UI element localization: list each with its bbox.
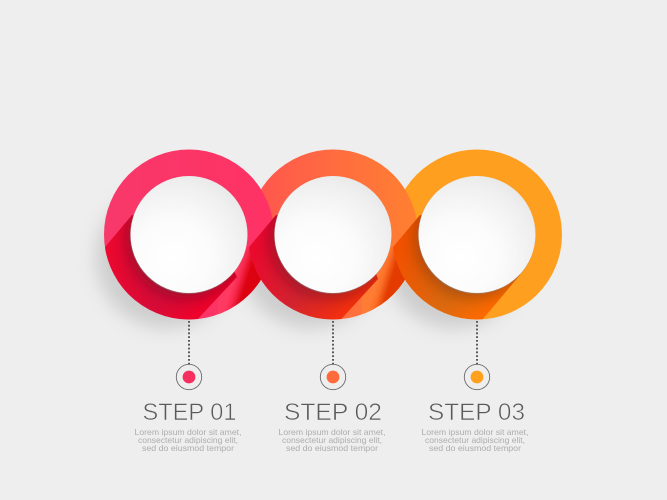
ring 1 diagonal shadow band bbox=[105, 215, 237, 320]
heading: step 01: STEP 01 bbox=[142, 399, 236, 426]
text block 2: Lorem ipsum dolor sit amet, bbox=[278, 428, 386, 437]
text block 2: consectetur adipiscing elit, bbox=[282, 436, 382, 445]
text block 2 bbox=[278, 428, 386, 453]
node 1 bbox=[176, 364, 202, 390]
text block 1: Lorem ipsum dolor sit amet, bbox=[134, 428, 242, 437]
heading: step 03: STEP 03 bbox=[428, 399, 525, 426]
text block 2: sed do eiusmod tempor bbox=[286, 444, 378, 453]
text block 3: Lorem ipsum dolor sit amet, bbox=[422, 428, 528, 437]
node 3 bbox=[464, 364, 490, 390]
text block 1: consectetur adipiscing elit, bbox=[138, 436, 238, 445]
heading: step 02: STEP 02 bbox=[284, 399, 382, 426]
node 2 bbox=[320, 364, 346, 390]
text block 3 bbox=[422, 428, 528, 453]
connector 3 bbox=[476, 321, 478, 364]
ring 3 base bbox=[392, 150, 562, 320]
text block 3: sed do eiusmod tempor bbox=[429, 444, 521, 453]
connector 1 bbox=[188, 321, 190, 364]
ring 2 base bbox=[261, 150, 416, 320]
disc 2 bbox=[274, 176, 392, 294]
text block 3: consectetur adipiscing elit, bbox=[425, 436, 525, 445]
ground shadows bbox=[96, 188, 524, 328]
disc 1 bbox=[130, 176, 248, 294]
connector 2 bbox=[332, 321, 334, 364]
text block 1 bbox=[134, 428, 242, 453]
ring 1 base bbox=[104, 150, 272, 320]
text block 1: sed do eiusmod tempor bbox=[142, 444, 234, 453]
ring 3 diagonal shadow band bbox=[393, 215, 520, 320]
disc 3 bbox=[418, 176, 536, 294]
ring 2 diagonal shadow band bbox=[249, 215, 378, 320]
